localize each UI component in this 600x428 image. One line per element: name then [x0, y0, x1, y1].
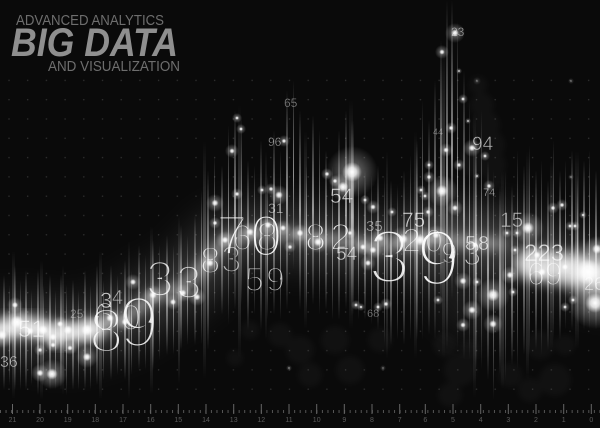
horizontal axis ruler: 21 [9, 417, 16, 424]
small numbers: 223 [524, 240, 564, 267]
horizontal axis ruler: 6 [423, 417, 427, 424]
numbers: right cluster: 69 [527, 256, 563, 292]
horizontal axis ruler: 8 [370, 417, 374, 424]
numbers: centre cluster: 9 [266, 261, 285, 299]
numbers: right cluster: 3 [463, 235, 481, 272]
numbers: centre cluster: 3 [221, 239, 242, 280]
title: line 1: ADVANCED ANALYTICS [16, 13, 164, 29]
horizontal axis ruler: 18 [91, 417, 99, 424]
small numbers: 54 [330, 185, 354, 208]
small numbers: 44 [433, 127, 443, 137]
horizontal axis ruler: 4 [479, 417, 483, 424]
numbers: centre cluster: 8 [200, 240, 221, 281]
numbers: left cluster: 0 [121, 297, 141, 338]
horizontal axis ruler: 3 [506, 417, 510, 424]
horizontal axis ruler: 11 [285, 417, 293, 424]
numbers: left cluster: 6 [93, 295, 115, 339]
small numbers: 96 [268, 135, 282, 149]
numbers: centre cluster: 5 [245, 261, 264, 299]
numbers: left cluster: 3 [176, 256, 202, 308]
horizontal axis ruler: 2 [534, 417, 538, 424]
data band glow [0, 205, 600, 336]
numbers: right cluster [402, 213, 563, 302]
numbers: left cluster: 9 [119, 283, 159, 363]
small numbers: 31 [268, 200, 284, 216]
small numbers: 8 [478, 233, 489, 255]
small numbers: 74 [483, 187, 495, 199]
horizontal axis ruler: 19 [64, 417, 72, 424]
horizontal axis ruler: 17 [119, 417, 127, 424]
small numbers: 94 [472, 134, 494, 155]
numbers: left cluster: 8 [89, 297, 123, 366]
numbers: centre cluster: 8 [256, 215, 278, 259]
title: line 3: AND VISUALIZATION [48, 59, 180, 75]
title block [11, 13, 180, 75]
numbers: right cluster: 2 [402, 222, 421, 260]
horizontal axis ruler: 10 [313, 417, 321, 424]
small numbers: 75 [402, 209, 425, 232]
numbers: centre cluster: 6 [232, 217, 252, 258]
numbers: right cluster: 9 [416, 213, 460, 302]
horizontal axis ruler [0, 404, 600, 424]
numbers: right cluster: 9 [441, 237, 458, 270]
small numbers: 25 [70, 307, 84, 321]
numbers: centre cluster: 8 [305, 217, 326, 259]
horizontal axis ruler: 13 [230, 417, 238, 424]
numbers: centre cluster: 3 [368, 215, 410, 300]
small numbers: 35 [366, 218, 383, 235]
numbers: left cluster: 3 [146, 251, 174, 307]
small numbers: 3 [100, 288, 112, 313]
horizontal axis ruler: 15 [174, 417, 182, 424]
horizontal axis ruler: 20 [36, 417, 44, 424]
faint bokeh cloud [227, 76, 575, 407]
horizontal axis ruler: 5 [451, 417, 455, 424]
numbers: centre cluster: 0 [250, 204, 282, 269]
horizontal axis ruler: 7 [398, 417, 402, 424]
numbers: centre cluster: 2 [330, 217, 351, 259]
small numbers: 51 [18, 316, 45, 343]
small numbers: 54 [336, 244, 358, 265]
numbers: centre cluster [200, 204, 410, 300]
horizontal axis ruler: 12 [257, 417, 265, 424]
numbers: right cluster: 0 [425, 223, 443, 259]
title: big data: BIG DATA [11, 21, 178, 65]
small numbers: 65 [284, 96, 298, 110]
numbers: centre cluster: 7 [216, 204, 248, 268]
small numbers: 15 [500, 209, 523, 232]
small numbers: 36 [0, 354, 18, 371]
horizontal axis ruler: 1 [562, 417, 566, 424]
numbers: left cluster [89, 251, 202, 366]
horizontal axis ruler: 0 [589, 417, 593, 424]
small numbers: 5 [465, 233, 476, 255]
horizontal axis ruler: 16 [147, 417, 155, 424]
horizontal axis ruler: 9 [342, 417, 346, 424]
horizontal axis ruler: 14 [202, 417, 210, 424]
small numbers: 68 [367, 308, 379, 320]
small numbers: 4 [112, 287, 123, 309]
small numbers: 23 [451, 25, 465, 39]
